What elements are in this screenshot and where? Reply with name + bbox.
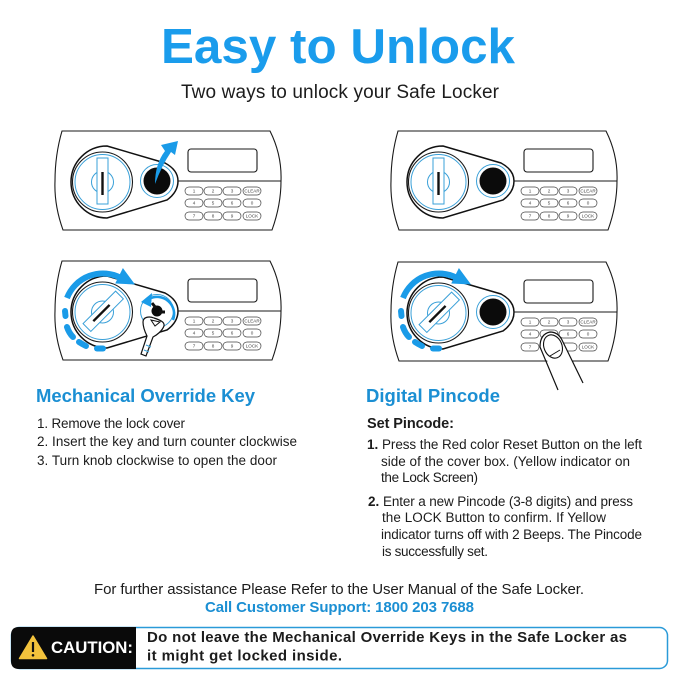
- panel: lock with cover removed and arrow: [55, 131, 281, 230]
- step 2: new pincode: indicator turns off with 2 Beeps. The Pincode: [381, 527, 642, 542]
- keypad labels: 3: [567, 189, 570, 194]
- keypad labels: 0: [251, 331, 254, 336]
- steps: mechanical override: 1. Remove the lock cover: [37, 416, 186, 431]
- step 1: reset button: [367, 437, 642, 485]
- caution message: Do not leave the Mechanical Override Keys in the Safe Locker as: [147, 629, 627, 646]
- keypad labels: 4: [193, 201, 196, 206]
- keypad labels: CLEAR: [580, 320, 596, 325]
- panel: pincode entry with finger: [391, 262, 617, 390]
- steps: mechanical override: 2. Insert the key and turn counter clockwise: [37, 434, 297, 449]
- keypad labels: 4: [529, 332, 532, 337]
- keypad labels: 5: [548, 201, 551, 206]
- subtitle: Two ways to unlock your Safe Locker: [181, 82, 500, 103]
- step 1: reset button: Press the Red color Reset Button on the left: [382, 437, 642, 452]
- keypad labels: 0: [251, 201, 254, 206]
- heading: digital pincode: Digital Pincode: [366, 385, 500, 406]
- keypad labels: CLEAR: [244, 189, 260, 194]
- steps: mechanical override: [37, 416, 297, 468]
- step 1: reset button: side of the cover box. (Yellow indicator on: [381, 454, 630, 469]
- caution message: it might get locked inside.: [147, 648, 342, 664]
- keypad labels: LOCK: [582, 214, 595, 219]
- keypad labels: 3: [567, 320, 570, 325]
- panel: key turned counter clockwise: [55, 261, 281, 360]
- keypad labels: 8: [212, 214, 215, 219]
- keypad labels: 5: [212, 201, 215, 206]
- step 2: new pincode: Enter a new Pincode (3-8 digits) and press: [383, 494, 633, 509]
- keypad labels: 0: [587, 332, 590, 337]
- keypad labels: 2: [212, 189, 215, 194]
- keypad labels: 6: [567, 201, 570, 206]
- step 2: new pincode: 2.: [368, 494, 379, 509]
- keypad labels: 1: [529, 320, 532, 325]
- keypad labels: 8: [212, 344, 215, 349]
- steps: mechanical override: 3. Turn knob clockwise to open the door: [37, 453, 278, 468]
- keypad labels: 9: [231, 344, 234, 349]
- keypad labels: LOCK: [246, 214, 259, 219]
- keypad labels: 6: [567, 332, 570, 337]
- keypad labels: 7: [529, 214, 532, 219]
- keypad labels: 5: [212, 331, 215, 336]
- keypad labels: LOCK: [246, 344, 259, 349]
- keypad labels: 3: [231, 319, 234, 324]
- title: Easy to Unlock: [161, 20, 516, 74]
- keypad labels: 9: [231, 214, 234, 219]
- subheading: set pincode: Set Pincode:: [367, 416, 454, 432]
- keypad labels: 4: [193, 331, 196, 336]
- keypad labels: 7: [529, 345, 532, 350]
- keypad labels: LOCK: [582, 345, 595, 350]
- step 2: new pincode: is successfully set.: [382, 544, 488, 559]
- keypad labels: 1: [193, 319, 196, 324]
- panel: lock with knob: [391, 131, 617, 230]
- keypad labels: 3: [231, 189, 234, 194]
- customer support line: Call Customer Support: 1800 203 7688: [205, 599, 474, 616]
- keypad labels: [529, 320, 596, 350]
- keypad labels: [193, 189, 260, 219]
- caution banner: [11, 627, 668, 669]
- icon: finger pressing key: [540, 332, 584, 390]
- keypad labels: 6: [231, 201, 234, 206]
- caution message: [147, 629, 627, 664]
- caution label: CAUTION:: [51, 638, 133, 657]
- arrow: counter clockwise key turn: [141, 293, 174, 320]
- step 1: reset button: 1.: [367, 437, 378, 452]
- keypad labels: 1: [193, 189, 196, 194]
- keypad labels: 1: [529, 189, 532, 194]
- keypad labels: CLEAR: [580, 189, 596, 194]
- keypad labels: [529, 189, 596, 219]
- heading: mechanical override key: Mechanical Override Key: [36, 385, 256, 406]
- icon: warning triangle: [20, 636, 46, 658]
- keypad labels: 2: [548, 320, 551, 325]
- keypad labels: 7: [193, 214, 196, 219]
- keypad labels: 8: [548, 214, 551, 219]
- keypad labels: 7: [193, 344, 196, 349]
- arrow: lift cover: [155, 141, 178, 184]
- keypad labels: 0: [587, 201, 590, 206]
- keypad labels: 9: [567, 214, 570, 219]
- keypad labels: CLEAR: [244, 319, 260, 324]
- footer note: For further assistance Please Refer to the User Manual of the Safe Locker.: [94, 581, 584, 598]
- keypad labels: 2: [212, 319, 215, 324]
- keypad labels: 4: [529, 201, 532, 206]
- step 2: new pincode: [368, 494, 642, 559]
- keypad labels: 2: [548, 189, 551, 194]
- icon: knob with key: [141, 303, 165, 356]
- step 1: reset button: the Lock Screen): [381, 470, 478, 485]
- keypad labels: [193, 319, 260, 349]
- keypad labels: 6: [231, 331, 234, 336]
- step 2: new pincode: the LOCK Button to confirm. If Yellow: [382, 510, 606, 525]
